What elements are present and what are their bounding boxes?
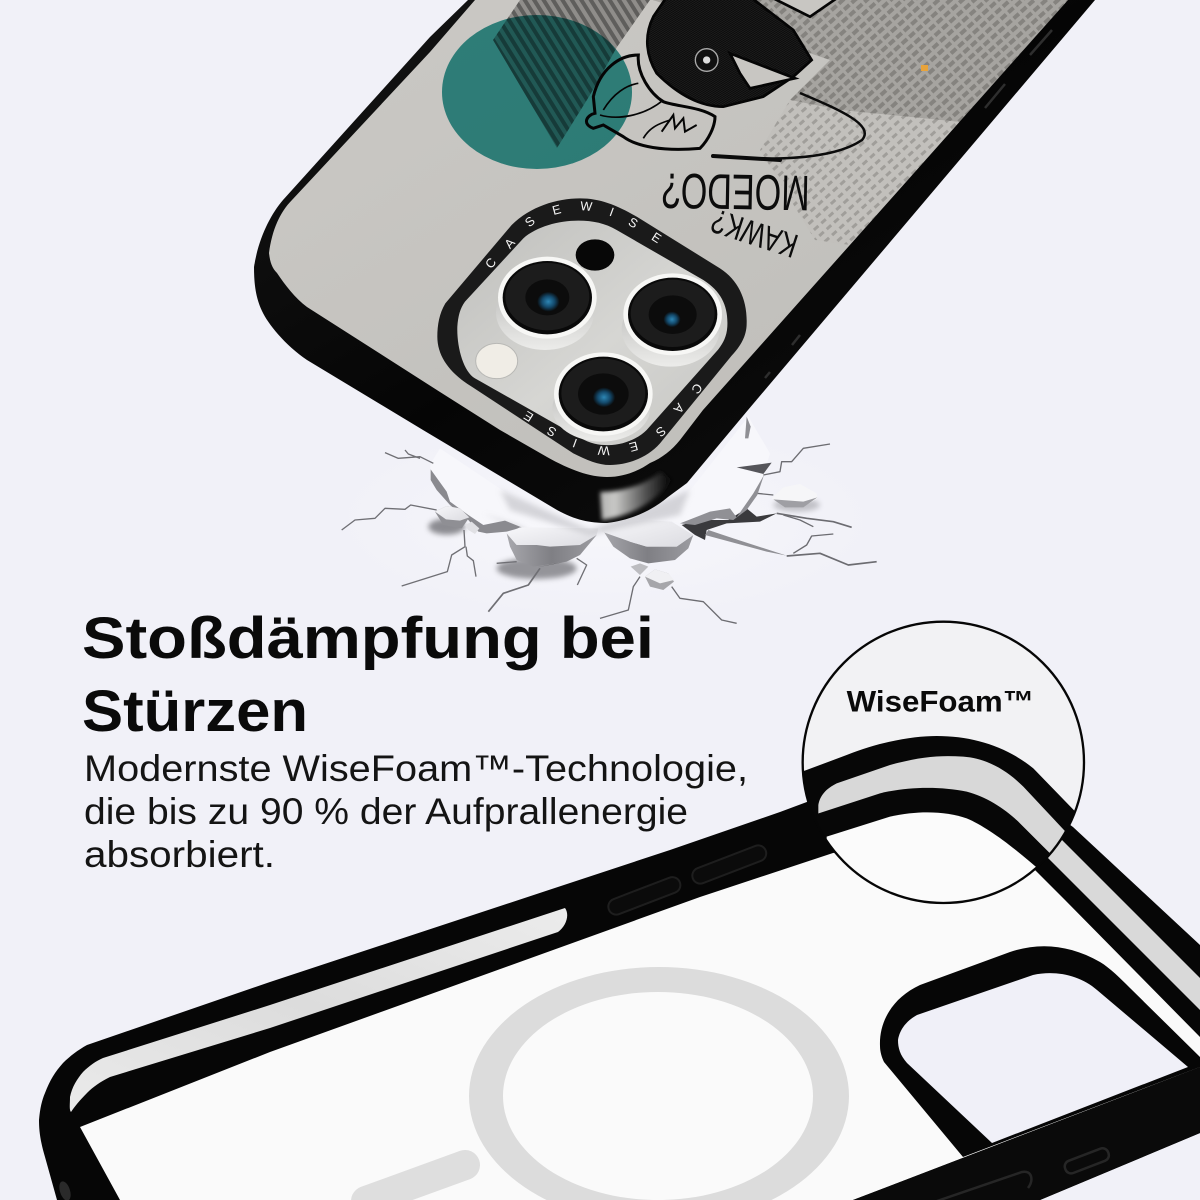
wedge (705, 530, 787, 556)
building photo faint (760, 100, 960, 245)
glass base (260, 0, 1080, 490)
camera cutout rim (880, 946, 1200, 1157)
handwriting KAWK: KAWK? (707, 201, 802, 265)
body line 2: die bis zu 90 % der Aufprallenergie (84, 791, 688, 832)
top phone in case (254, 0, 1095, 523)
case corner shine (600, 472, 672, 520)
orange dot (921, 65, 928, 71)
fragment top right (773, 0, 837, 17)
slab right (667, 417, 770, 523)
handwriting MOEDO: MOEDO? (661, 162, 810, 221)
hairline cracks (342, 450, 587, 612)
WiseFoam magnifier callout (793, 622, 1087, 927)
crack left part (342, 448, 598, 612)
fish body (647, 0, 812, 107)
ring text bottom: CASEWISE (521, 380, 705, 458)
building photo left (493, 0, 650, 148)
center chunk top (602, 520, 693, 547)
crack right part (600, 417, 877, 623)
magnifier label: WiseFoam™ (847, 686, 1034, 719)
body text (84, 748, 748, 875)
cup inner lines (600, 83, 670, 138)
case bottom band (853, 1067, 1200, 1200)
bottom buttons (905, 1147, 1111, 1200)
impact shadow (500, 490, 690, 535)
bottom clear case (39, 745, 1200, 1200)
lidar sensor (576, 239, 614, 271)
heading line 2: Stürzen (82, 679, 308, 744)
pebbles (631, 563, 648, 575)
body line 1: Modernste WiseFoam™-Technologie, (84, 748, 748, 789)
center chunk side (602, 528, 693, 563)
side button details (765, 30, 1052, 378)
foam gap right (1045, 840, 1200, 1010)
fish eye (695, 49, 718, 71)
lens two (622, 273, 722, 367)
phone case body (254, 0, 1095, 523)
wall left (431, 469, 522, 533)
heading line 1: Stoßdämpfung bei (82, 606, 654, 671)
camera cutout hole (898, 973, 1188, 1143)
body line 3: absorbiert. (84, 834, 275, 875)
big chunk (507, 533, 597, 567)
small chunk right (773, 498, 820, 512)
camera module (437, 198, 747, 465)
fish beak (730, 53, 795, 88)
small chunk two (465, 522, 479, 534)
slab left (431, 448, 557, 527)
camera ring (437, 198, 747, 465)
building photo right (653, 0, 1068, 122)
magnifier outline (803, 622, 1084, 903)
dark triangle (737, 463, 772, 474)
case black frame (39, 745, 1200, 1200)
floor crack (335, 417, 877, 623)
lens three (552, 352, 653, 442)
swoosh line (765, 92, 866, 160)
top stub (745, 417, 751, 438)
side buttons (606, 843, 769, 917)
magnified case corner (804, 736, 1074, 902)
lens one (496, 257, 597, 350)
slab shadow (483, 513, 547, 543)
wall shadow (497, 558, 577, 579)
small chunk one (435, 506, 469, 528)
flash (476, 343, 518, 379)
fish drawing (586, 0, 837, 149)
magnifier background (803, 622, 1084, 903)
gap dark (682, 508, 777, 540)
crack floor glow (335, 420, 875, 620)
heading (82, 606, 654, 744)
chunk shadow (428, 519, 465, 535)
corner port (57, 1180, 73, 1200)
MagSafe pill (366, 1165, 465, 1200)
ring text top: CASEWISE (483, 199, 664, 271)
right hairlines (600, 444, 877, 623)
foam gap left (70, 908, 567, 1112)
camera plateau (457, 221, 727, 445)
teal circle (442, 15, 632, 169)
MagSafe ring (469, 967, 849, 1200)
right wall (680, 475, 764, 525)
clear back panel (80, 830, 1200, 1200)
cup scribble (662, 115, 697, 132)
cup outline (586, 55, 715, 149)
glass back with artwork (260, 0, 1080, 490)
